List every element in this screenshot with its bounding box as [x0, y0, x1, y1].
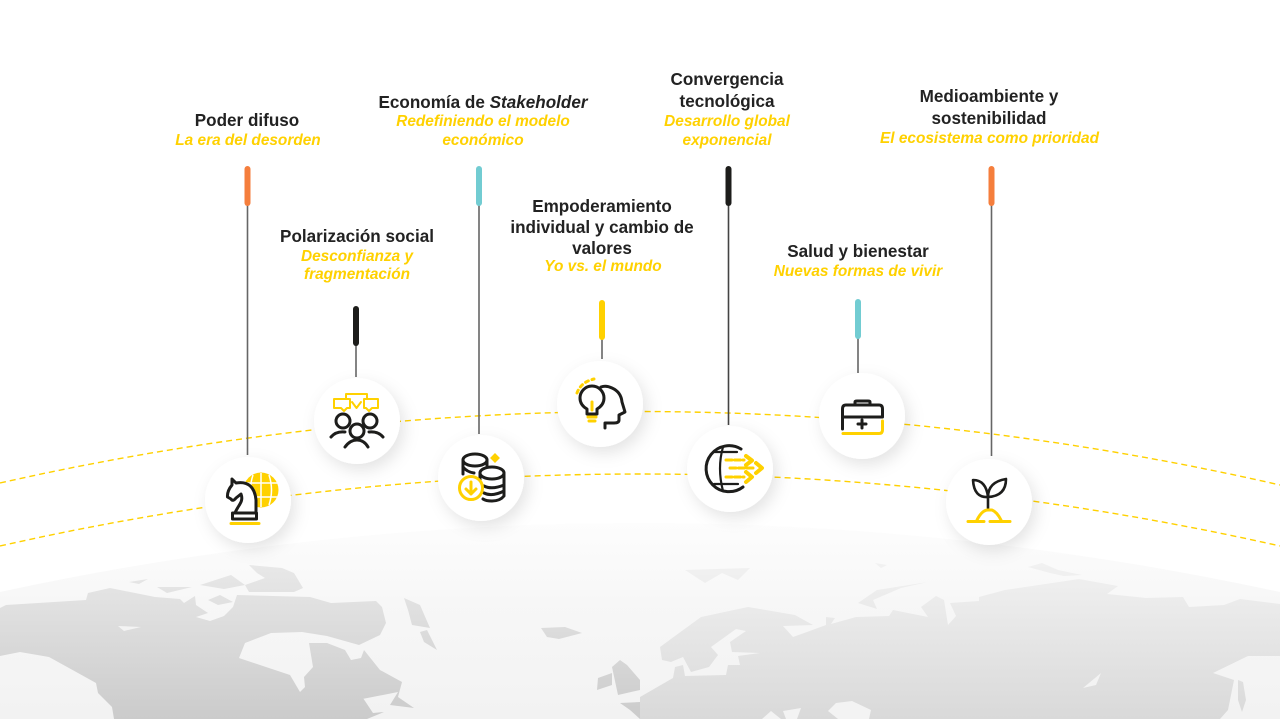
icon: coins with down arrow: [460, 453, 504, 501]
heading: Convergencia: [670, 70, 784, 89]
icon: first aid case: [842, 401, 882, 434]
pin: [988, 166, 994, 206]
globe with world map: [0, 523, 1280, 719]
subtitle: exponencial: [683, 132, 772, 149]
icon: sprout: [968, 479, 1010, 522]
circle: [314, 378, 400, 464]
topic: Poder difuso: [175, 111, 321, 543]
dashed orbit arcs: [0, 411, 1280, 546]
heading: [920, 87, 1059, 128]
heading: sostenibilidad: [932, 109, 1046, 128]
heading: individual y cambio de: [510, 218, 694, 237]
subtitle: Yo vs. el mundo: [544, 258, 662, 275]
subtitle: Desarrollo global: [664, 113, 791, 130]
icon: globe with arrows: [706, 446, 762, 492]
subtitle: Nuevas formas de vivir: [774, 263, 943, 280]
pin: [244, 166, 250, 206]
subtitle: económico: [442, 132, 524, 149]
heading: Economía de Stakeholder: [378, 93, 589, 112]
pin: [599, 300, 605, 340]
heading: Empoderamiento: [532, 197, 672, 216]
pin: [855, 299, 861, 339]
connector line: [246, 200, 248, 455]
heading: [670, 70, 784, 111]
heading: Polarización social: [280, 227, 434, 246]
heading: Medioambiente y: [920, 87, 1059, 106]
circle: [946, 459, 1032, 545]
subtitle: fragmentación: [304, 266, 410, 283]
subtitle: [301, 248, 414, 283]
icon: head and light bulb: [577, 379, 625, 428]
subtitle: [396, 113, 570, 149]
topic: Convergencia tecnológica: [664, 70, 791, 512]
map: North America and Greenland: [0, 565, 640, 719]
topic: Salud y bienestar: [774, 242, 943, 459]
connector line: [990, 200, 992, 456]
subtitle: Desconfianza y: [301, 248, 414, 265]
connector line: [355, 340, 357, 377]
heading: tecnológica: [680, 92, 775, 111]
connector line: [857, 333, 859, 373]
icon: people with speech bubbles: [331, 394, 383, 447]
subtitle: [664, 113, 791, 149]
subtitle: Redefiniendo el modelo: [396, 113, 570, 130]
pin: [353, 306, 359, 346]
connector line: [728, 200, 730, 425]
circle: [205, 457, 291, 543]
circle: [557, 361, 643, 447]
topic: Economía de Stakeholder: [378, 93, 589, 521]
heading: valores: [572, 239, 632, 258]
circle: [687, 426, 773, 512]
connector line: [478, 200, 480, 434]
map: Eurasia: [640, 563, 1280, 719]
heading: Poder difuso: [195, 111, 299, 130]
heading: Salud y bienestar: [787, 242, 929, 261]
subtitle: El ecosistema como prioridad: [880, 130, 1100, 147]
heading: [510, 197, 694, 258]
topic: Medioambiente y sostenibilidad: [880, 87, 1100, 545]
pin: [726, 166, 732, 206]
pin: [476, 166, 482, 206]
topic: Polarización social: [280, 227, 434, 464]
icon: chess knight and globe: [227, 472, 279, 524]
topic: Empoderamiento individual: [510, 197, 694, 447]
circle: [819, 373, 905, 459]
connector line: [601, 334, 603, 359]
circle: [438, 435, 524, 521]
subtitle: La era del desorden: [175, 132, 321, 149]
